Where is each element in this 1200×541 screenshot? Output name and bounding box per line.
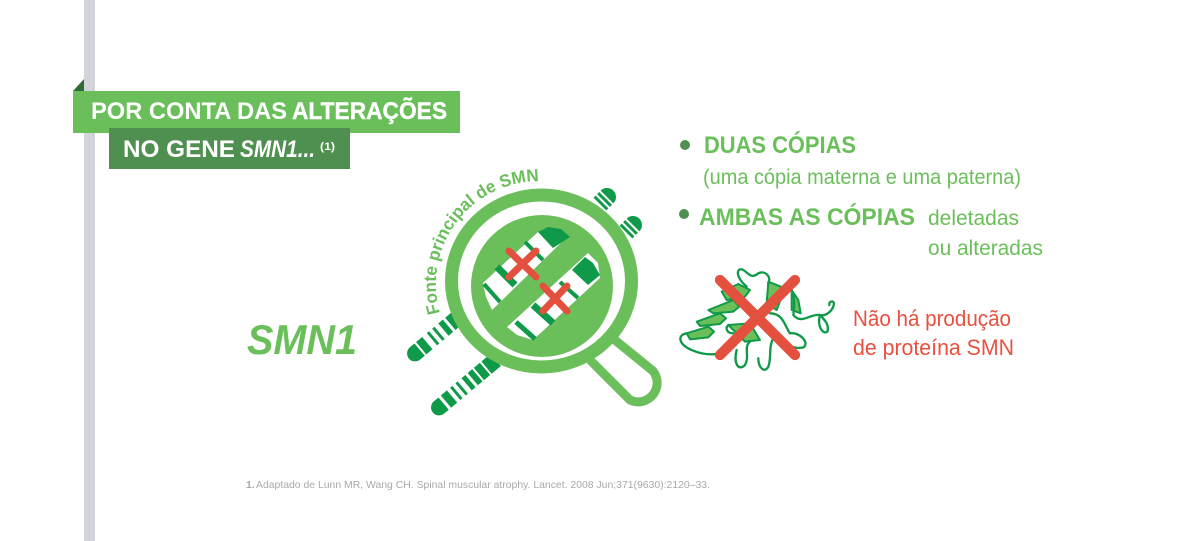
vertical grey bar	[84, 0, 95, 541]
red caption	[853, 306, 1014, 360]
curved label: Fonte principal de SMN	[424, 169, 538, 315]
bullet list: AMBAS AS CÓPIAS	[699, 203, 915, 231]
heading banner	[73, 79, 460, 169]
footnote reference: 1.	[246, 479, 255, 491]
chromosome fragments outside the lens	[404, 184, 646, 419]
heading banner: POR CONTA DAS	[91, 98, 287, 125]
red caption: de proteína SMN	[853, 335, 1014, 360]
red caption: Não há produção	[853, 306, 1011, 331]
heading banner: NO GENE	[123, 136, 235, 163]
bullet list: (uma cópia materna e uma paterna)	[703, 166, 1021, 189]
gene label SMN1: SMN1	[247, 316, 357, 363]
footnote reference: Adaptado de Lunn MR, Wang CH. Spinal muscular atrophy. Lancet. 2008 Jun;371(9630):2120–33.	[256, 479, 710, 491]
bullet list: ou alteradas	[928, 237, 1043, 260]
magnifying glass	[452, 195, 657, 402]
chromosome inside lens	[483, 227, 600, 340]
heading banner: (1)	[320, 141, 335, 153]
icon: crossed-out SMN protein	[680, 269, 834, 370]
bullet list: deletadas	[928, 207, 1019, 230]
red crosses	[509, 251, 567, 311]
heading banner: SMN1...	[240, 136, 315, 163]
bullet list: DUAS CÓPIAS	[704, 131, 856, 159]
bullet list	[679, 131, 1043, 260]
heading banner: ALTERAÇÕES	[292, 97, 447, 125]
